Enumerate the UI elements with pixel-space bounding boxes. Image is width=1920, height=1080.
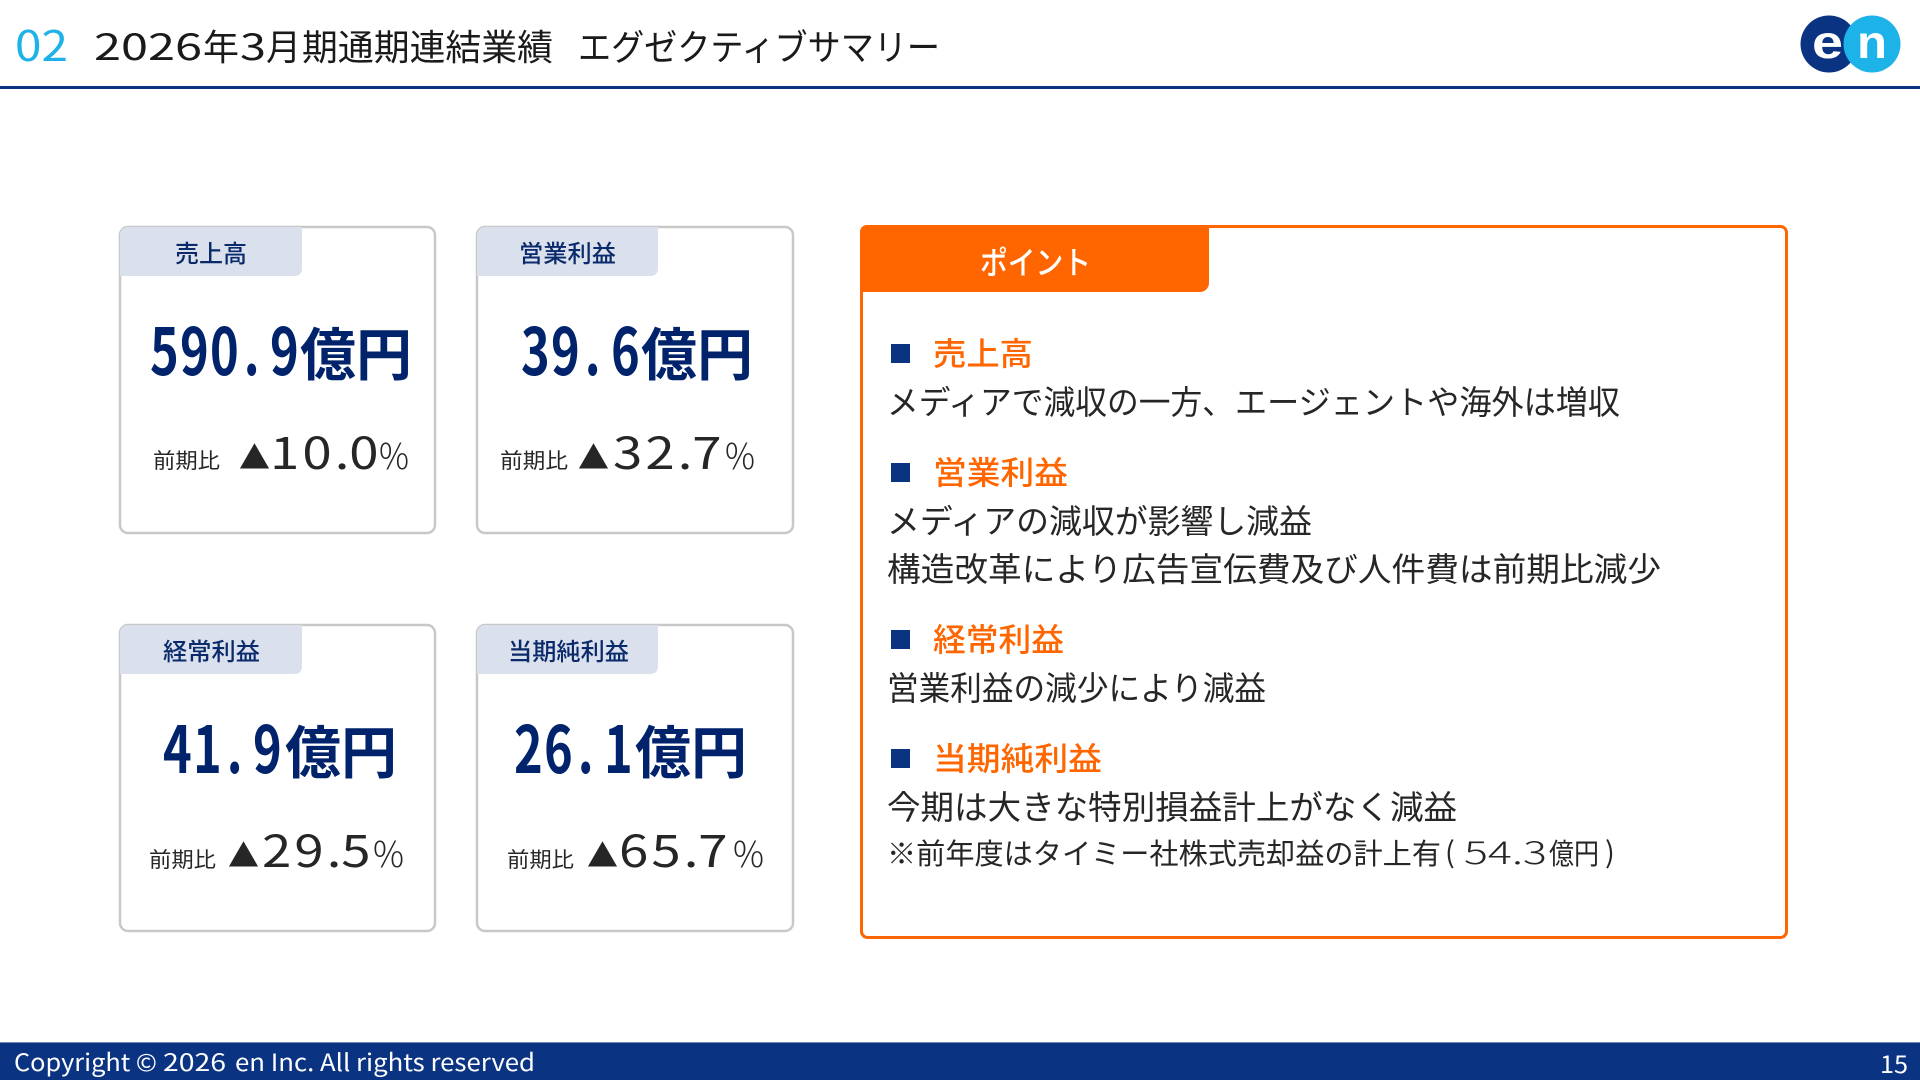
- point: 売上高: エージェントや海外は増収: [1235, 376, 1620, 424]
- point: 営業利益: メディアの減収が影響し減益: [887, 495, 1312, 543]
- card label: [120, 227, 302, 276]
- value: [150, 299, 412, 394]
- panel: 営業利益 card: [477, 227, 793, 533]
- point: 営業利益: [887, 448, 1661, 591]
- title: 3: [240, 19, 266, 71]
- value: 26.1: [514, 697, 633, 792]
- point: 売上高: [887, 329, 1620, 424]
- value: 590.9: [150, 299, 299, 394]
- year-on-year change: ▲: [578, 433, 609, 478]
- point: 当期純利益: 54.3: [1464, 828, 1547, 873]
- year-on-year change: %: [379, 428, 409, 480]
- copyright: [14, 1043, 535, 1078]
- point: 営業利益: 構造改革により広告宣伝費及び人件費は前期比減少: [887, 543, 1661, 591]
- point: 当期純利益: ※前年度はタイミー社株式売却益の計上有: [887, 831, 1441, 873]
- value: 億円: [285, 708, 397, 790]
- copyright: en Inc. All rights reserved: [235, 1043, 535, 1078]
- year-on-year change: 前期比: [507, 844, 574, 874]
- point: 当期純利益: 億円: [1549, 831, 1599, 873]
- card label: [477, 227, 658, 276]
- year-on-year change: %: [373, 826, 404, 878]
- year-on-year change: 65.7: [619, 816, 727, 880]
- year-on-year change: [507, 816, 764, 880]
- icon: en logo: [1800, 16, 1900, 72]
- copyright: 2026: [163, 1043, 226, 1078]
- point: 当期純利益: [887, 734, 1615, 873]
- value: 億円: [641, 310, 753, 392]
- year-on-year change: 29.5: [262, 816, 370, 880]
- year-on-year change: 32.7: [613, 418, 721, 482]
- card label: [477, 625, 658, 674]
- title: [94, 19, 940, 71]
- year-on-year change: [153, 418, 409, 482]
- footer bar: [0, 1042, 1920, 1080]
- value: [163, 697, 397, 792]
- year-on-year change: %: [733, 826, 764, 878]
- value: 39.6: [521, 299, 640, 394]
- card label: 経常利益: [163, 632, 260, 667]
- point: 営業利益: 営業利益: [933, 448, 1068, 494]
- year-on-year change: 前期比: [153, 445, 220, 475]
- year-on-year change: [500, 418, 755, 482]
- copyright: Copyright ©: [14, 1043, 157, 1078]
- point: 売上高: 売上高: [933, 329, 1033, 375]
- panel: 売上高 card: [120, 227, 435, 533]
- value: [514, 697, 747, 792]
- header: [0, 13, 1920, 89]
- year-on-year change: 前期比: [500, 445, 568, 475]
- point: 経常利益: 経常利益: [933, 615, 1064, 661]
- point: 経常利益: [887, 615, 1266, 710]
- panel: 経常利益 card: [120, 625, 435, 931]
- year-on-year change: ▲: [239, 433, 270, 478]
- title: 月: [266, 19, 301, 71]
- title: 年: [203, 19, 239, 71]
- card label: 当期純利益: [508, 632, 629, 667]
- value: [521, 299, 753, 394]
- point: 経常利益: 営業利益の減少により減益: [887, 662, 1266, 710]
- page number: 15: [1880, 1045, 1908, 1080]
- panel: ポイント: [860, 225, 1786, 938]
- icon: en logo: n: [1857, 16, 1887, 68]
- panel heading: ポイント: [980, 238, 1091, 284]
- panel heading: [860, 225, 1209, 292]
- title: 期通期連結業績: [302, 19, 553, 71]
- year-on-year change: 10.0: [270, 418, 378, 482]
- year-on-year change: [149, 816, 404, 880]
- title: エグゼクティブサマリー: [578, 19, 940, 71]
- panel: 当期純利益 card: [477, 625, 793, 931]
- point: 当期純利益: (: [1445, 830, 1455, 872]
- card label: 営業利益: [519, 234, 616, 269]
- value: 億円: [300, 310, 412, 392]
- card label: [120, 625, 302, 674]
- icon: en logo: e: [1812, 16, 1843, 68]
- year-on-year change: ▲: [228, 831, 259, 876]
- point: 売上高: メディアで減収の一方、: [887, 376, 1234, 424]
- year-on-year change: 前期比: [149, 844, 216, 874]
- year-on-year change: %: [725, 428, 755, 480]
- value: 41.9: [163, 697, 282, 792]
- section number: 02: [15, 13, 68, 74]
- year-on-year change: ▲: [587, 831, 618, 876]
- point: 当期純利益: 今期は大きな特別損益計上がなく減益: [887, 781, 1457, 829]
- point: 当期純利益: ): [1605, 830, 1615, 872]
- value: 億円: [635, 708, 747, 790]
- point: 当期純利益: 当期純利益: [933, 734, 1102, 780]
- title: 2026: [94, 19, 202, 71]
- card label: 売上高: [175, 234, 247, 269]
